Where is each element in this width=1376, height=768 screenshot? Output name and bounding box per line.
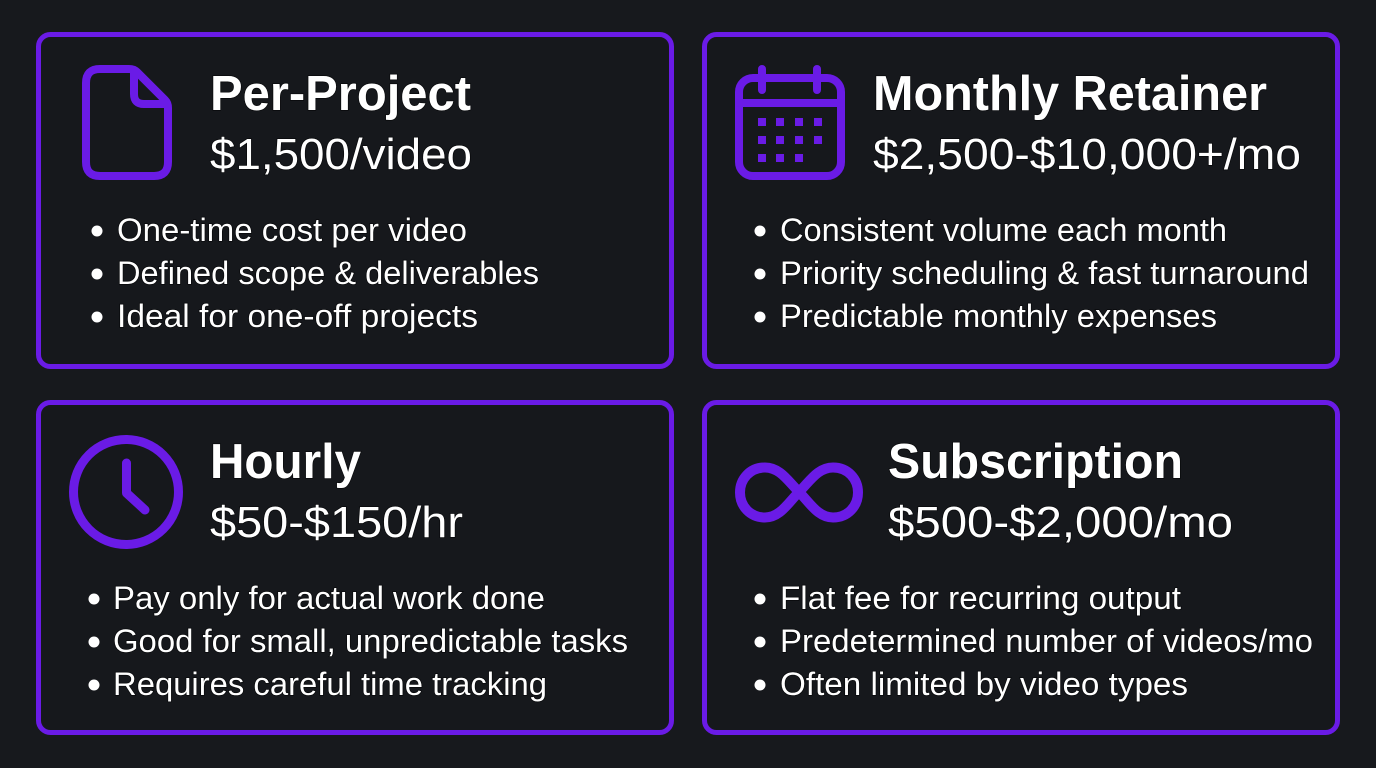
price: per project: $1,500/video — [210, 130, 472, 179]
panel: Monthly Retainer — [704, 34, 1338, 366]
bullet list: Per-Project: Ideal for one-off projects — [117, 298, 478, 334]
bullet list: Subscription: Predetermined number of videos/mo — [780, 623, 1313, 659]
panel: Hourly — [38, 402, 672, 732]
bullet list: Monthly Retainer: Consistent volume each month — [780, 212, 1227, 248]
card frame: Hourly — [38, 402, 672, 732]
bullet list: Monthly Retainer: Priority scheduling & fast turnaround — [780, 255, 1309, 291]
bullet list: Monthly Retainer — [754, 212, 1309, 334]
bullet list: Hourly: Pay only for actual work done — [113, 580, 545, 616]
bullet list: Subscription — [754, 580, 1313, 702]
icon: calendar — [739, 69, 841, 176]
panel: Subscription — [704, 402, 1338, 732]
bullet list: Per-Project: Defined scope & deliverables — [117, 255, 539, 291]
card frame: Per-Project — [38, 34, 672, 366]
icon: document — [86, 69, 168, 176]
bullet list: Subscription: Flat fee for recurring output — [780, 580, 1181, 616]
price: hourly: $50-$150/hr — [210, 498, 463, 547]
heading: Hourly: Hourly — [210, 435, 361, 489]
price: monthly retainer: $2,500-$10,000+/mo — [873, 130, 1301, 179]
bullet list: Hourly: Good for small, unpredictable tasks — [113, 623, 628, 659]
card frame: Monthly Retainer — [704, 34, 1338, 366]
bullet list: Per-Project: One-time cost per video — [117, 212, 467, 248]
heading: Monthly Retainer: Monthly Retainer — [873, 67, 1267, 121]
icon: clock — [74, 440, 178, 544]
heading: Per-Project: Per-Project — [210, 67, 471, 121]
bullet list: Subscription: Often limited by video types — [780, 666, 1188, 702]
panel: Per-Project — [38, 34, 672, 366]
bullet list: Monthly Retainer: Predictable monthly expenses — [780, 298, 1217, 334]
bullet list: Hourly: Requires careful time tracking — [113, 666, 547, 702]
bullet list: Hourly — [88, 580, 628, 702]
icon: infinity — [740, 468, 858, 518]
bullet list: Per-Project — [92, 212, 539, 334]
card frame: Subscription — [704, 402, 1338, 732]
price: subscription: $500-$2,000/mo — [888, 498, 1233, 547]
heading: Subscription: Subscription — [888, 435, 1183, 489]
